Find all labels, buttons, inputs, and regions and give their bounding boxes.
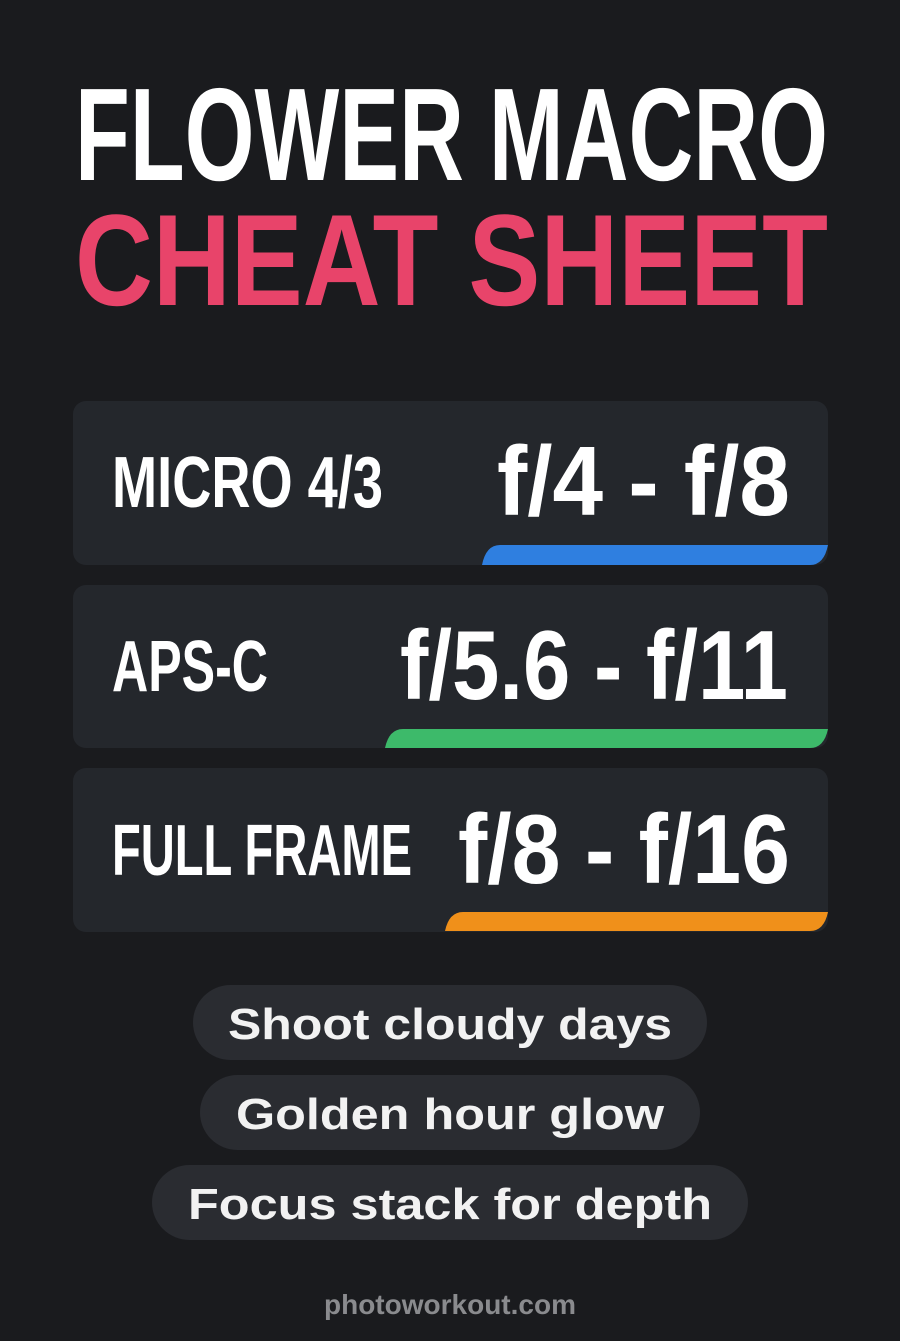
card: full frame: f/8 - f/16 [458, 794, 790, 904]
pill: shoot cloudy days [193, 985, 707, 1060]
card: full frame: FULL FRAME [112, 811, 412, 891]
pill: focus stack for depth [152, 1165, 748, 1240]
pill: focus stack for depth: Focus stack for depth [188, 1180, 712, 1229]
title [75, 61, 828, 333]
card: aps-c: f/5.6 - f/11 [400, 610, 788, 720]
card: micro 4/3: MICRO 4/3 [112, 443, 383, 523]
footer url: photoworkout.com [324, 1289, 576, 1320]
card: micro 4/3: f/4 - f/8 [497, 426, 790, 536]
pill: shoot cloudy days: Shoot cloudy days [228, 1000, 672, 1049]
pill: golden hour glow: Golden hour glow [236, 1090, 665, 1139]
card: micro 4/3 [73, 401, 828, 565]
pill: golden hour glow [200, 1075, 700, 1150]
card: aps-c [73, 585, 828, 748]
card: aps-c: APS-C [112, 627, 268, 707]
card: full frame [73, 768, 828, 932]
